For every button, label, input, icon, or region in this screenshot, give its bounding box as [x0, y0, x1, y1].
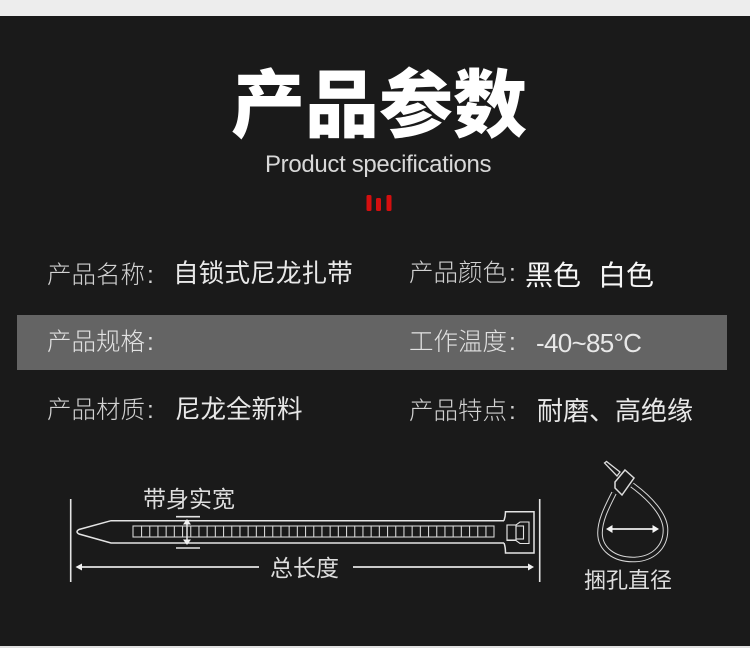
tie head — [504, 512, 534, 553]
bottom light band — [0, 646, 750, 648]
label: total length: 总长度 — [270, 555, 339, 581]
diagram: cable tie with dimensions — [70, 499, 540, 582]
tie body outline — [77, 521, 504, 543]
diagram: looped cable tie — [597, 460, 668, 562]
strap tail — [604, 462, 620, 476]
spec value: material: 尼龙全新料 — [175, 396, 303, 424]
spec: product material: 产品材质: — [47, 397, 154, 424]
spec value: temperature: -40~85°C — [536, 328, 641, 358]
spec value: product name: 自锁式尼龙扎带 — [173, 260, 353, 288]
spec: product size: 产品规格: — [47, 329, 154, 356]
tie rack — [133, 526, 494, 537]
title: 产品参数 — [231, 64, 527, 147]
top light band — [0, 0, 750, 16]
label: hole diameter: 捆孔直径 — [584, 568, 672, 593]
subtitle: Product specifications — [265, 151, 491, 178]
spec: product name: 产品名称: — [47, 262, 154, 289]
lock head — [615, 470, 634, 495]
spec value: product colour: 黑色 白色 — [525, 260, 654, 291]
highlighted spec row band — [17, 315, 727, 370]
spec: product features: 产品特点: — [409, 398, 516, 425]
spec: product colour: 产品颜色: — [409, 260, 516, 287]
extents — [71, 499, 540, 582]
strap width marker — [176, 517, 200, 548]
label: strap width: 带身实宽 — [143, 486, 235, 512]
spec: working temperature: 工作温度: — [409, 329, 516, 356]
spec value: features: 耐磨、高绝缘 — [537, 396, 693, 426]
icon: red bars accent — [366, 195, 392, 211]
hole diameter arrow — [606, 525, 659, 533]
loop tube — [600, 485, 666, 560]
total length arrows — [76, 564, 534, 570]
